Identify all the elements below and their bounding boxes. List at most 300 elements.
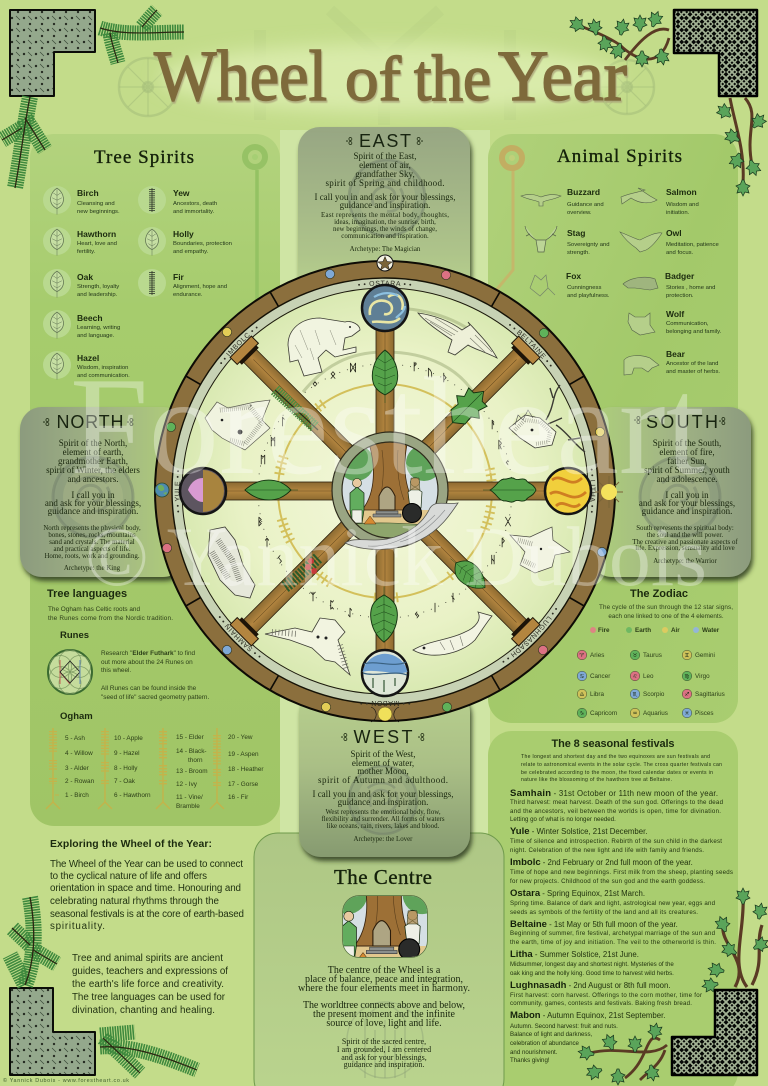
text: east: Spirit of the East, xyxy=(354,151,416,161)
text: west: WEST xyxy=(354,727,412,747)
runes: ᛞ xyxy=(349,362,357,374)
ogham labels: 4 - Willow xyxy=(65,750,93,757)
ogham labels: 16 - Fir xyxy=(228,794,249,801)
section: seasonal festivals: Time of hope and new beginnings. First milk from the sheep, planting seeds xyxy=(510,869,733,876)
section: seasonal festivals: night. Celebration of the new light and life with family and friends. xyxy=(510,847,704,854)
festival names on ring: • • LITHA • • xyxy=(590,468,596,513)
text: east: grandfather Sky, xyxy=(355,169,415,179)
text: north: NORTH xyxy=(56,412,124,432)
element circle: air xyxy=(362,285,408,331)
section: exploring the wheel: orientation in space and time. Honouring and xyxy=(50,883,241,894)
star sign labels: ♐ xyxy=(685,692,690,698)
festival names on ring xyxy=(174,280,596,706)
animal: salmon xyxy=(413,612,492,655)
tree: yew: Yew xyxy=(173,188,190,198)
animal: buzzard entry xyxy=(521,187,604,216)
animal: buzzard xyxy=(418,313,497,358)
tree: holly: Boundaries, protection xyxy=(173,241,232,247)
tree: holly: Holly xyxy=(173,229,194,239)
text: fox: Cunningness xyxy=(567,285,601,291)
tree: beech: Beech xyxy=(77,313,103,323)
tree: hawthorn: fertility. xyxy=(77,249,96,255)
text: east: guidance and inspiration. xyxy=(340,200,430,210)
text: south: and adolescence. xyxy=(657,474,717,484)
text: the centre: where the four elements meet in harmony. xyxy=(298,983,470,994)
emblem: east triskele xyxy=(349,160,425,236)
watermark: © Yannick Dubois xyxy=(85,510,707,604)
section: seasonal festivals xyxy=(510,738,733,1064)
section: exploring the wheel: celebrating natural rhythms through the xyxy=(50,896,220,907)
tree: beech xyxy=(43,310,120,339)
tree: beech: and language. xyxy=(77,333,115,339)
animal: owl entry xyxy=(620,228,719,256)
section: seasonal festivals: Autumn. Second harvest: fruit and nuts. xyxy=(510,1023,618,1030)
leaf: birch north xyxy=(372,350,398,403)
animal: wolf entry xyxy=(628,309,722,335)
runes: ᛟ xyxy=(330,370,336,381)
festival names on ring: • • OSTARA • • xyxy=(358,280,412,286)
animal: stag entry: Stag xyxy=(567,228,585,238)
animal: stag entry xyxy=(525,226,610,256)
panel: east xyxy=(298,127,470,307)
ogham labels xyxy=(65,734,264,810)
text: north: North represents the physical body, xyxy=(43,525,141,532)
text: south xyxy=(632,412,738,565)
tree: beech: Learning, writing xyxy=(77,325,120,331)
emblem: north earth xyxy=(53,457,133,537)
text: south: SOUTH xyxy=(646,412,718,432)
runes: ᚹ xyxy=(500,537,506,549)
section: tree languages: Ogham xyxy=(60,711,93,722)
section: seasonal festivals: community, games, contests and festivals. Baking fresh bread. xyxy=(510,1000,692,1007)
text: the centre: The centre of the Wheel is a xyxy=(328,965,441,976)
animal: wolf entry: belonging and family. xyxy=(666,329,722,335)
section: seasonal festivals: Yule - Winter Solstice, 21st December. xyxy=(510,826,647,837)
runes xyxy=(257,361,512,621)
section: exploring the wheel: divination, chanting and healing. xyxy=(72,1005,215,1016)
text: north: grandmother Earth, xyxy=(58,456,128,466)
text: north: bones, stones, rocks, mountains xyxy=(48,532,136,539)
section: exploring the wheel: to the cyclical nature of life and offers xyxy=(50,871,207,882)
title xyxy=(154,36,627,116)
runes: ᚾ xyxy=(450,592,456,604)
ogham ring xyxy=(258,364,512,618)
section: tree languages xyxy=(46,588,264,810)
animal: salmon entry: initiation. xyxy=(666,210,690,216)
leaf: beech southeast xyxy=(444,550,492,596)
text: north: and practical aspects of life. xyxy=(53,546,131,553)
text: south: Archetype: the Warrior xyxy=(653,558,718,565)
star sign labels: ♑ xyxy=(580,711,585,717)
section: seasonal festivals: The longest and shortest day and the two equinoxes are sun festivals and xyxy=(521,754,710,760)
ogham labels: 17 - Gorse xyxy=(228,781,259,788)
ogham labels: 3 - Alder xyxy=(65,765,90,772)
zodiac markers on rim xyxy=(162,269,607,712)
section: seasonal festivals: be celebrated according to the moon, the fixed calendar dates or events in xyxy=(521,770,713,776)
star sign labels: Pisces xyxy=(695,710,714,717)
runes: ᛗ xyxy=(270,436,276,448)
animal: fox entry xyxy=(530,275,555,296)
text: south: The creative and passionate aspects of xyxy=(632,539,738,546)
element legend: Air xyxy=(671,627,680,634)
animal: stag xyxy=(509,385,585,452)
text: north: Archetype: the King xyxy=(64,565,121,572)
runes: ᛇ xyxy=(347,607,353,619)
text: the centre: Spirit of the sacred centre, xyxy=(342,1037,426,1046)
tree: hazel: and communication. xyxy=(77,373,130,379)
tree: hawthorn xyxy=(43,227,117,256)
section: exploring the wheel: The Wheel of the Year can be used to connect xyxy=(50,859,243,870)
section: seasonal festivals: seeds as symbols of the fertility of the land and all its creatures. xyxy=(510,909,698,916)
section: the zodiac: each one linked to one of the 4 elements. xyxy=(608,613,724,620)
fir branch: bottom left lower xyxy=(100,1032,197,1073)
section: seasonal festivals: for new projects. Childhood of the sun god and the earth goddess. xyxy=(510,878,705,885)
text: west: guidance and inspiration. xyxy=(338,797,428,807)
tree: hawthorn: Hawthorn xyxy=(77,229,116,239)
celtic knot: bottom left xyxy=(10,988,95,1075)
animal: salmon entry: Wisdom and xyxy=(666,202,699,208)
section: the zodiac: The Zodiac xyxy=(630,588,688,600)
star sign labels: ♓ xyxy=(685,710,690,717)
panel: north xyxy=(20,407,185,577)
section: seasonal festivals: Ostara - Spring Equinox, 21st March. xyxy=(510,888,645,899)
runes: ᚱ xyxy=(497,439,503,451)
text: east: ideas, imagination, the sunrise, birth, xyxy=(334,219,436,226)
ogham labels: 5 - Ash xyxy=(65,735,85,742)
image: centre scene xyxy=(342,895,428,958)
text: fox: Fox xyxy=(566,271,581,281)
festival names on ring: • • SAMHAIN • • xyxy=(218,616,260,658)
celtic knot: bottom right xyxy=(672,990,757,1075)
star sign labels xyxy=(580,652,725,717)
star sign labels: ♉ xyxy=(633,653,638,659)
text: south: father Sun, xyxy=(667,456,707,466)
section: exploring the wheel: The tree languages can be used for xyxy=(72,992,226,1003)
element legend: Water xyxy=(702,627,720,634)
ogham labels: 15 - Elder xyxy=(176,734,205,741)
tree: fir: Alignment, hope and xyxy=(173,284,227,290)
text: the centre: the present moment and the infinite xyxy=(313,1009,456,1020)
element circle: water xyxy=(362,650,408,696)
text: west: element of water, xyxy=(352,758,414,768)
animal: fox xyxy=(510,527,570,573)
element legend: Earth xyxy=(635,627,651,634)
tree: hazel: Wisdom, inspiration xyxy=(77,365,128,371)
star sign labels: Sagittarius xyxy=(695,691,725,698)
tree: birch: Cleansing and xyxy=(77,201,115,207)
runes: ᛈ xyxy=(329,599,335,611)
animal: badger entry xyxy=(623,271,715,299)
runes: ᛊ xyxy=(277,554,283,566)
section: exploring the wheel: the earth's life force and creativity. xyxy=(72,979,224,990)
section: seasonal festivals: celebration of abundance xyxy=(510,1040,580,1047)
tree: hazel xyxy=(43,351,130,380)
celtic knot: top right xyxy=(674,10,757,96)
runes: ᛖ xyxy=(260,454,266,466)
star sign labels: Aquarius xyxy=(643,710,668,717)
text: south: element of fire, xyxy=(659,447,715,457)
connector: animal spirits ring xyxy=(467,148,522,325)
text: north: I call you in xyxy=(71,490,115,500)
star sign labels: ♒ xyxy=(633,711,638,717)
text: east: spirit of Spring and childhood. xyxy=(326,178,444,188)
ogham labels: 13 - Broom xyxy=(176,768,208,775)
text: west: Archetype: the Lover xyxy=(354,836,413,843)
star sign labels: Leo xyxy=(643,673,654,680)
ogham labels: 11 - Vine/ xyxy=(176,794,203,801)
panel: south xyxy=(590,407,751,577)
tree: fir: endurance. xyxy=(173,292,203,298)
animal: owl xyxy=(265,618,350,675)
leaf: alder west xyxy=(245,480,298,500)
runes: ᛏ xyxy=(264,537,270,549)
section: seasonal festivals: Beginning of summer, fire festival, archetypal marriage of the sun and xyxy=(510,930,716,937)
section: seasonal festivals: Letting go of what is no longer needed. xyxy=(510,816,616,823)
celtic knot: top left xyxy=(10,10,95,96)
section: seasonal festivals: Balance of light and darkness, xyxy=(510,1031,593,1038)
panel: animal spirits and zodiac xyxy=(488,134,738,723)
ivy branch: right xyxy=(714,98,768,196)
section: tree languages: the Runes come from the Nordic tradition. xyxy=(48,615,173,622)
text: the centre: place of balance, peace and integration, xyxy=(305,974,463,985)
heading: animal spirits: Animal Spirits xyxy=(557,146,682,167)
runes: ᛒ xyxy=(257,516,263,528)
emblem: faint tree in centre panel xyxy=(347,1002,423,1078)
star sign labels: ♊ xyxy=(685,652,690,659)
section: seasonal festivals: Third harvest: meat harvest. Death of the sun god. Offerings to the dead xyxy=(510,799,724,806)
panel: tree spirits and tree languages xyxy=(30,134,280,826)
icon: earth globe xyxy=(155,483,169,497)
tree: oak xyxy=(43,269,119,298)
tree: fir: Fir xyxy=(173,272,185,282)
text: south: I call you in xyxy=(665,490,709,500)
runes: ᚺ xyxy=(490,554,496,566)
text: west: Spirit of the West, xyxy=(350,749,416,759)
watermark xyxy=(70,349,707,604)
text: the centre xyxy=(298,965,470,1069)
animal: owl entry: Owl xyxy=(666,228,682,238)
centre medallion xyxy=(320,430,460,550)
star sign labels: ♍ xyxy=(685,674,690,680)
text: west xyxy=(312,727,454,843)
section: the zodiac xyxy=(577,588,733,718)
text: north: sand and crystals. The material xyxy=(49,539,135,546)
text: north: element of earth, xyxy=(63,447,123,457)
tree: hawthorn: Heart, love and xyxy=(77,241,117,247)
text: north: Spirit of the North, xyxy=(59,438,127,448)
runes: ᛁ xyxy=(432,602,438,614)
text: west: I call you in and ask for your blessings, xyxy=(312,789,454,799)
text: south: life. Expression, sensuality and love xyxy=(635,545,735,552)
section: seasonal festivals: relate to astronomical events in the solar cycle. The cross quarter festivals can xyxy=(521,762,722,768)
section: seasonal festivals: First harvest: corn harvest. Offerings to the corn mother, time for xyxy=(510,992,702,999)
star sign labels: Cancer xyxy=(590,673,610,680)
text: north: and ask for your blessings, xyxy=(45,498,141,508)
section: tree languages: out more about the 24 Runes on xyxy=(101,659,193,666)
tree spirits list xyxy=(43,186,232,380)
section: seasonal festivals: Thanks giving! xyxy=(510,1057,550,1064)
icon: seed of life xyxy=(48,650,92,694)
star sign labels: Capricorn xyxy=(590,710,618,717)
text: the centre: and ask for your blessings, xyxy=(341,1053,427,1062)
leaf: holly southwest xyxy=(285,558,318,587)
ogham labels: 10 - Apple xyxy=(114,735,143,742)
text: east: Archetype: The Magician xyxy=(350,246,421,253)
section: seasonal festivals: Imbolc - 2nd February or 2nd full moon of the year. xyxy=(510,857,693,868)
section: tree languages: "seed of life" sacred geometry pattern. xyxy=(101,694,209,701)
ogham labels: thorn xyxy=(188,757,203,764)
runes: ᚦ xyxy=(442,372,448,384)
title: Year xyxy=(498,36,627,116)
runes: ᛃ xyxy=(414,610,420,621)
text: east: communication and inspiration. xyxy=(341,233,429,240)
text: east xyxy=(314,131,456,253)
ogham labels: Bramble xyxy=(176,803,200,810)
tree: yew xyxy=(138,186,217,215)
ogham labels: 14 - Black- xyxy=(176,748,207,755)
text: east: new beginnings, the winds of change, xyxy=(333,226,437,233)
text: east: element of air, xyxy=(359,160,411,170)
runes: ᚢ xyxy=(427,367,433,379)
footer credit: © Yannick Dubois - www.forestheart.co.uk xyxy=(3,1077,129,1084)
star sign labels: Libra xyxy=(590,691,604,698)
ivy branch: bottom right upper xyxy=(701,888,768,993)
tree: birch xyxy=(43,186,120,215)
festival names on ring: • • MABON • • xyxy=(359,699,411,706)
runes: ᚨ xyxy=(490,419,496,431)
text: south: the soul and the will power. xyxy=(647,532,723,539)
animal: owl entry: Meditation, patience xyxy=(666,242,719,248)
star sign labels: ♎ xyxy=(580,692,585,698)
text: east: EAST xyxy=(359,131,411,151)
text: south: spirit of Summer, youth xyxy=(644,465,730,475)
animal: badger xyxy=(208,527,255,598)
ivy branch: bottom right lower xyxy=(577,1022,667,1085)
animal: buzzard entry: Buzzard xyxy=(567,187,600,197)
animal spirits list xyxy=(521,187,722,375)
text: north: guidance and inspiration. xyxy=(48,506,138,516)
section: seasonal festivals: Mabon - Autumn Equinox, 21st September. xyxy=(510,1010,665,1021)
text: north: Home, roots, work and grounding. xyxy=(44,553,140,560)
element legend: Fire xyxy=(598,627,610,634)
section: seasonal festivals: oak king and the holly king. Good time to harvest wild herbs. xyxy=(510,970,674,977)
icon: sun xyxy=(595,476,623,508)
star sign labels: Scorpio xyxy=(643,691,665,698)
element circle: fire xyxy=(545,468,591,514)
panel: the centre xyxy=(254,833,504,1086)
runes: ᛉ xyxy=(310,591,317,603)
ogham labels: 6 - Hawthorn xyxy=(114,792,151,799)
section: exploring the wheel xyxy=(50,839,244,1016)
tree: oak: and leadership. xyxy=(77,292,118,298)
animal: salmon entry xyxy=(621,187,699,216)
festival names on ring: • • IMBOLC • • xyxy=(220,326,258,364)
animal: bear xyxy=(288,318,360,376)
runes: ᚠ xyxy=(412,361,418,373)
section: seasonal festivals: Midsummer, longest day and shortest night. Mysteries of the xyxy=(510,961,674,968)
section: seasonal festivals: Lughnasadh - 2nd August or 8th full moon. xyxy=(510,980,671,991)
text: east: I call you in and ask for your blessings, xyxy=(314,192,456,202)
leaf: oak east xyxy=(483,478,536,502)
section: tree languages: this wheel. xyxy=(101,667,131,674)
tree: oak: Oak xyxy=(77,272,93,282)
tree: fir xyxy=(138,269,227,298)
animal: wolf xyxy=(205,400,270,450)
fir sprig northwest xyxy=(275,390,318,430)
text: north xyxy=(43,412,141,572)
tree: birch: Birch xyxy=(77,188,99,198)
text: the centre: The worldtree connects above and below, xyxy=(303,1000,465,1011)
emblem: south fire xyxy=(640,457,720,537)
fir branch: bottom left upper xyxy=(10,897,57,985)
animal: owl entry: and focus. xyxy=(666,250,694,256)
star sign labels: ♌ xyxy=(633,674,638,680)
star sign labels: ♏ xyxy=(633,692,638,698)
panel: seasonal festivals xyxy=(488,731,738,1086)
section: exploring the wheel: guides, teachers and expressions of xyxy=(72,966,228,977)
heading: tree spirits: Tree Spirits xyxy=(94,147,194,168)
section: the zodiac: The cycle of the sun through the 12 star signs, xyxy=(599,604,733,611)
tree: yew: Ancestors, death xyxy=(173,201,217,207)
text: west: like oceans, rain, rivers, lakes and blood. xyxy=(327,823,440,830)
festival names on ring: • • YULE • • xyxy=(174,470,180,512)
text: north: and ancestors. xyxy=(68,474,118,484)
title: Wheel xyxy=(154,36,327,116)
animal: stag entry: strength. xyxy=(567,250,590,256)
text: west: mother Moon, xyxy=(357,766,409,776)
star sign labels: Taurus xyxy=(643,652,662,659)
spokes xyxy=(194,300,576,682)
animal: buzzard entry: Guidance and xyxy=(567,202,604,208)
section: exploring the wheel: Exploring the Wheel of the Year: xyxy=(50,839,212,850)
animal: wolf entry: Wolf xyxy=(666,309,684,319)
text: west: spirit of Autumn and adulthood. xyxy=(318,775,448,785)
text: the centre: I am grounded, I am centered xyxy=(337,1045,431,1054)
runes: ᚲ xyxy=(504,458,510,469)
watermark: Forestheart xyxy=(70,349,705,504)
runes: ᛚ xyxy=(280,416,286,428)
star sign labels: Aries xyxy=(590,652,604,659)
text: south: and ask for your blessings, xyxy=(639,498,735,508)
text: south: South represents the spiritual body: xyxy=(636,525,734,532)
faint spiral lines xyxy=(303,308,475,395)
faint title backdrop wheels xyxy=(119,10,654,125)
tree: oak: Strength, loyalty xyxy=(77,284,119,290)
element circle: earth xyxy=(180,468,226,514)
section: exploring the wheel: spirituality. xyxy=(50,921,105,932)
section: exploring the wheel: seasonal festivals is at the core of earth-based xyxy=(50,909,244,920)
animal: badger entry: Stories , home and xyxy=(666,285,715,291)
section: seasonal festivals: Litha - Summer Solstice, 21st June. xyxy=(510,949,639,960)
star sign labels: ♈ xyxy=(580,653,585,659)
animal: bear entry: Ancestor of the land xyxy=(666,361,718,367)
text: east: East represents the mental body, thoughts, xyxy=(321,212,449,219)
fir branch: top xyxy=(100,10,184,63)
animal: salmon entry: Salmon xyxy=(666,187,697,197)
animal: buzzard entry: overview. xyxy=(567,210,592,216)
ogham labels: 12 - Ivy xyxy=(176,781,198,788)
wheel of the year xyxy=(154,254,623,722)
panel: west xyxy=(299,690,470,857)
star sign labels: Virgo xyxy=(695,673,710,680)
festival names on ring: • • BELTAINE • • xyxy=(509,324,552,366)
wheel rim xyxy=(155,261,615,721)
text: fox: and playfulness. xyxy=(567,293,610,299)
tree: hazel: Hazel xyxy=(77,353,99,363)
section: seasonal festivals: and the ancestors, veil between the worlds is open, time for divination. xyxy=(510,808,721,815)
section: tree languages: Tree languages xyxy=(47,588,127,600)
text: north: spirit of Winter, the elders xyxy=(46,465,140,475)
